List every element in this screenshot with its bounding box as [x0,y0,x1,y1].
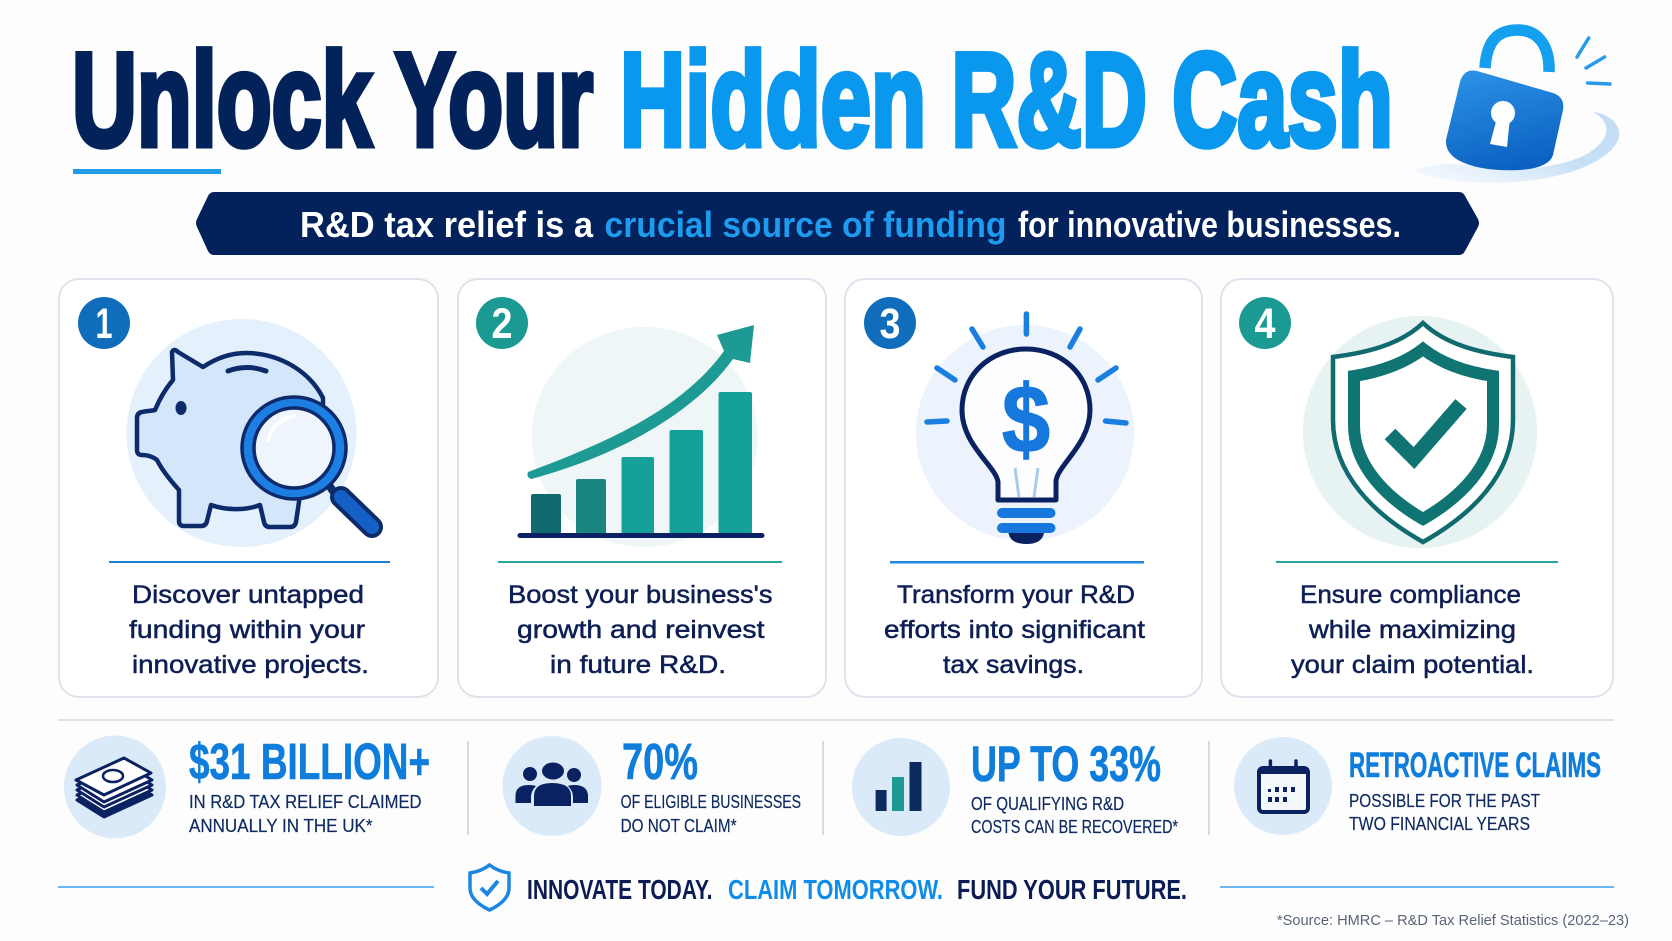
stat: retroactive claims: TWO FINANCIAL YEARS [1349,814,1530,834]
stat: retroactive claims: POSSIBLE FOR THE PAST [1349,791,1540,811]
card 1 text: funding within your [129,616,365,644]
banner: for innovative businesses. [1018,204,1401,245]
icon: people [502,736,602,836]
footer tagline [58,865,1614,910]
icon: shield with check [1303,316,1537,548]
stat: up to 33 percent: COSTS CAN BE RECOVERED* [971,817,1178,837]
stat: 70 percent: 70% [622,733,698,790]
stat: 70 percent: OF ELIGIBLE BUSINESSES [621,792,801,812]
footer tagline: INNOVATE TODAY. [527,874,712,905]
stat: up to 33 percent: OF QUALIFYING R&D [971,794,1124,814]
banner: crucial source of funding [604,204,1006,245]
panel: card 3 transform [845,279,1202,697]
card 2 text: Boost your business's [508,581,772,609]
card 2 text [508,581,772,679]
card 3 text [884,581,1145,679]
chart: rising bars with arrow [518,325,764,547]
panel: card 4 compliance [1221,279,1613,697]
title: Unlock Your [72,26,593,174]
card 2 text: in future R&D. [550,651,726,679]
source note: *Source: HMRC – R&D Tax Relief Statistics (2022–23) [1277,913,1629,929]
stat: up to 33 percent: UP TO 33% [971,736,1161,792]
icon: light bulb with dollar [916,314,1134,544]
card 2 text: growth and reinvest [517,616,765,644]
number badge 1: 1 [96,300,112,348]
number badge 3: 3 [880,300,900,348]
icon: open padlock [1412,30,1619,183]
number badge 3 [864,297,916,349]
number badge 2: 2 [492,300,512,348]
banner: R&D tax relief is a [300,204,594,245]
stat: up to 33 percent [852,736,1178,837]
stat: 70 percent [502,733,801,836]
stat: 70 percent: DO NOT CLAIM* [621,816,737,836]
card 1 text: Discover untapped [132,581,364,609]
icon: calendar [1234,737,1332,835]
icon: piggy bank with magnifier [126,319,372,547]
card 1 text: innovative projects. [132,651,369,679]
footer tagline: FUND YOUR FUTURE. [957,874,1187,905]
card 4 text: while maximizing [1308,616,1516,644]
card 1 text [129,581,369,679]
banner [196,192,1479,255]
card 3 text: Transform your R&D [897,581,1135,609]
number badge 4 [1239,297,1291,349]
title [72,26,1393,174]
icon: small shield [470,865,509,910]
number badge 2 [476,297,528,349]
stat: 31 billion: IN R&D TAX RELIEF CLAIMED [189,792,422,812]
stat: 31 billion: ANNUALLY IN THE UK* [189,816,372,836]
stat: retroactive claims [1234,737,1601,835]
icon: bar chart [852,738,950,836]
icon: stack of money [64,736,166,838]
number badge 1 [78,297,130,349]
number badge 4: 4 [1254,300,1276,348]
icon: light bulb with dollar: $ [1002,366,1050,473]
stat: 31 billion: $31 BILLION+ [189,733,430,790]
card 4 text: Ensure compliance [1300,581,1521,609]
stat: 31 billion [64,733,430,838]
card 3 text: efforts into significant [884,616,1145,644]
card 4 text: your claim potential. [1291,651,1534,679]
card 3 text: tax savings. [943,651,1084,679]
card 4 text [1291,581,1534,679]
footer tagline: CLAIM TOMORROW. [728,874,943,905]
panel: card 2 boost [458,279,826,697]
panel: card 1 discover [59,279,438,697]
